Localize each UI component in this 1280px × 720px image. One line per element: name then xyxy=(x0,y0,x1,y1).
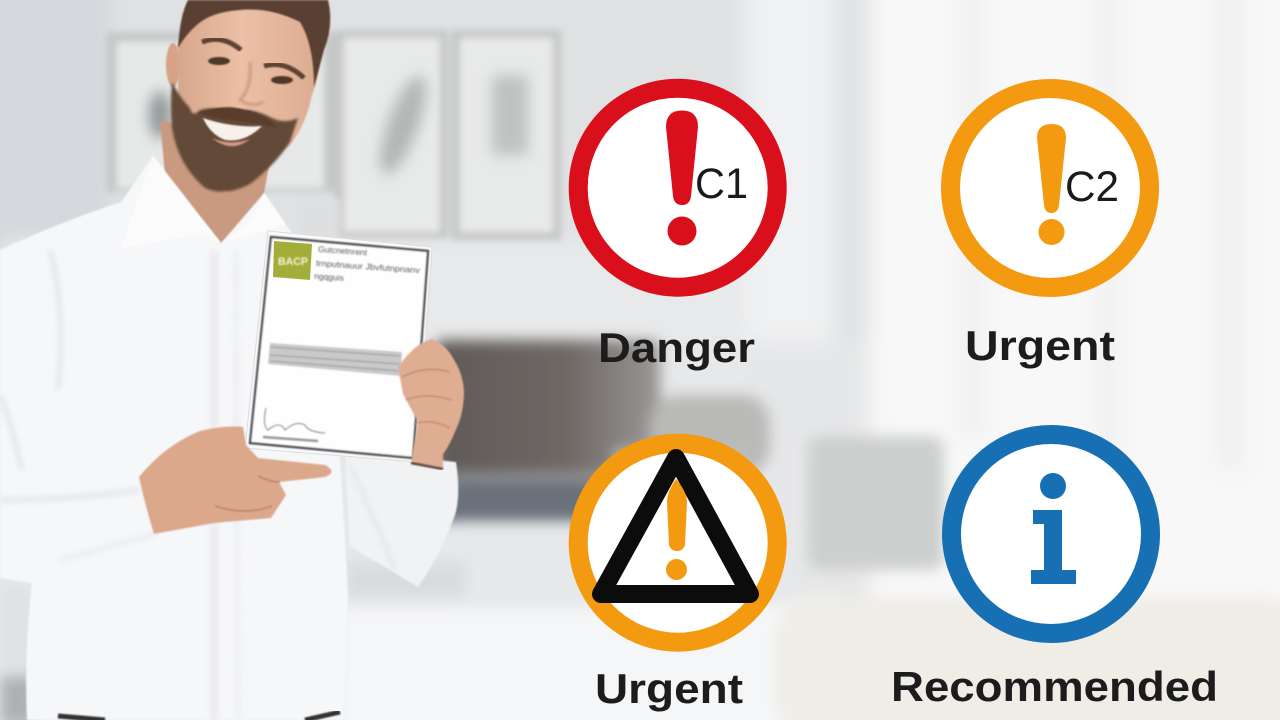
label: Danger: Danger xyxy=(598,324,755,371)
man holding report xyxy=(0,0,464,720)
certificate document xyxy=(245,231,432,462)
neck xyxy=(160,120,272,243)
icon: recommended information circle xyxy=(952,434,1150,634)
report heading: ngqguis xyxy=(314,271,344,283)
collar xyxy=(121,156,221,248)
report logo: BACP xyxy=(278,256,308,268)
hand holding report xyxy=(398,339,464,468)
report heading xyxy=(314,244,422,288)
moustache xyxy=(198,107,278,128)
hair xyxy=(178,0,330,87)
beard xyxy=(171,82,298,192)
icon: urgent C2 exclamation circle xyxy=(950,88,1150,288)
shirt body xyxy=(0,156,348,720)
shirt folds xyxy=(0,250,395,720)
icon: danger C1 exclamation circle xyxy=(578,88,777,287)
label: Recommended: Recommended xyxy=(891,663,1218,710)
report signature xyxy=(263,408,325,441)
face xyxy=(178,6,320,193)
eyes and brows xyxy=(202,39,241,50)
sofa xyxy=(0,340,944,720)
C2 code: C2 xyxy=(1065,163,1119,211)
pointing hand xyxy=(139,426,332,534)
belt xyxy=(58,712,340,720)
framed pictures xyxy=(106,30,561,240)
table and rug xyxy=(340,562,1280,720)
report heading: Gutcnetnrent xyxy=(318,244,368,257)
smile xyxy=(203,118,262,140)
report logo xyxy=(273,241,312,280)
icon: urgent warning triangle circle xyxy=(578,443,777,642)
shirt sleeve, his left arm xyxy=(345,450,458,587)
ear xyxy=(166,43,180,87)
report body text band xyxy=(268,343,402,376)
report heading: trnputnauur Jbvfutnpnanv xyxy=(316,258,421,275)
label: Urgent: Urgent xyxy=(595,665,743,712)
C1 code: C1 xyxy=(695,160,748,208)
label: Urgent: Urgent xyxy=(965,322,1115,369)
